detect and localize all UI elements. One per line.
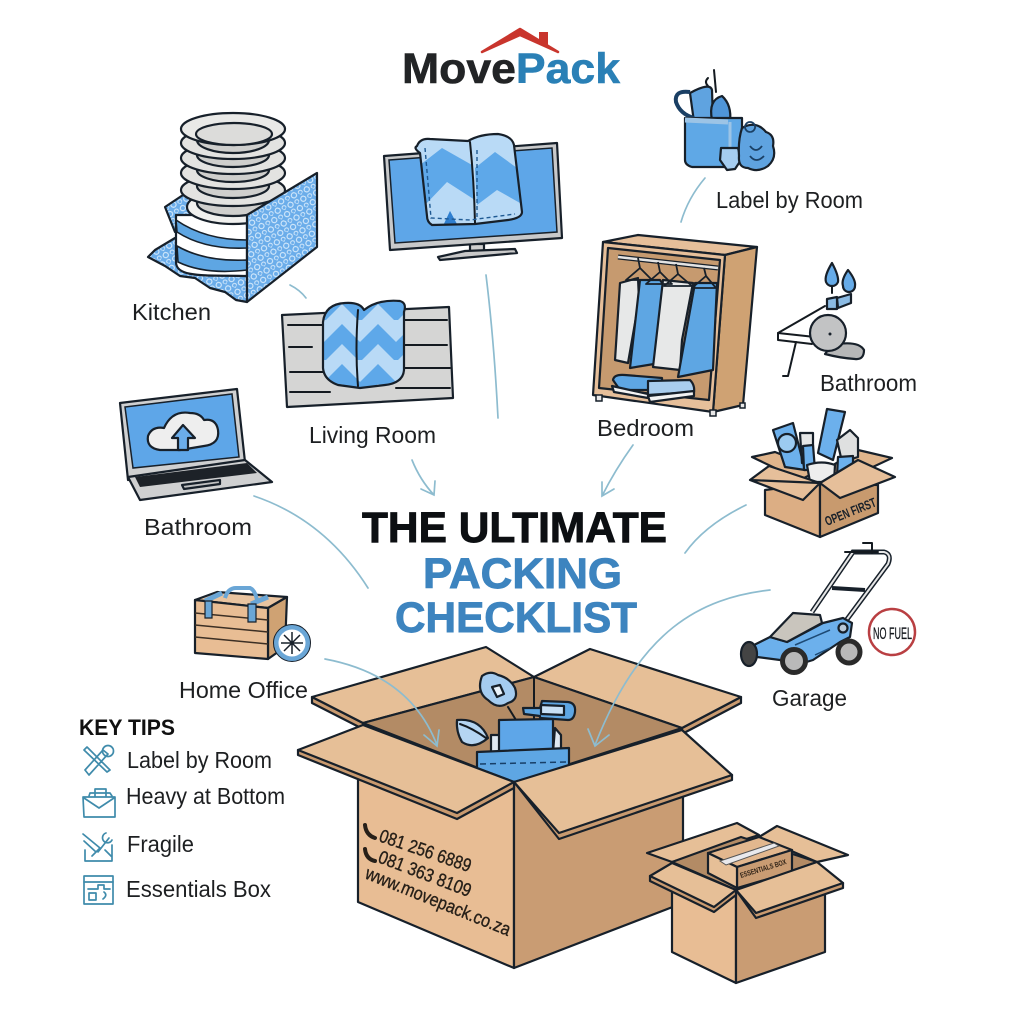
icon: wooden crate [195, 588, 310, 662]
title line 1: THE ULTIMATE [362, 504, 667, 552]
box contact text: 081 256 6889 [377, 825, 474, 876]
arrows into big box [325, 590, 770, 746]
box contact text: 081 363 8109 [376, 846, 475, 901]
logo roof [482, 29, 558, 52]
logo [402, 29, 620, 93]
key tips heading: KEY TIPS [79, 715, 175, 740]
title line 3: CHECKLIST [395, 594, 637, 642]
label: Bathroom (left): Bathroom [144, 514, 252, 540]
tip: Heavy at Bottom: Heavy at Bottom [126, 783, 285, 809]
box right face [514, 770, 683, 968]
box left face [358, 778, 514, 968]
tip: Label by Room: Label by Room [127, 747, 272, 773]
icon: rug with blanket [282, 301, 453, 407]
icon: no fuel badge [869, 609, 915, 655]
tip: Essentials Box: Essentials Box [126, 876, 271, 902]
icon: tap and basin [778, 263, 864, 376]
label: Home Office: Home Office [179, 677, 308, 703]
label: Garage: Garage [772, 685, 847, 711]
box contents [457, 673, 575, 782]
tip: Fragile: Fragile [127, 831, 194, 857]
box contact text: www.movepack.co.za [362, 862, 515, 940]
small cardboard box [647, 823, 848, 983]
box back flaps [312, 647, 741, 734]
icon: utensil bucket [676, 70, 774, 170]
label: Bathroom (right): Bathroom [820, 370, 917, 396]
icon: essentials box [750, 409, 895, 537]
label: Bedroom: Bedroom [597, 415, 694, 441]
label: Label by Room: Label by Room [716, 187, 863, 213]
icon: laptop with cloud upload [120, 389, 272, 500]
title [362, 504, 667, 642]
label: Living Room: Living Room [309, 422, 436, 448]
connector arrows [254, 178, 746, 588]
key tips panel [79, 715, 285, 904]
logo wordmark: MovePack [402, 45, 620, 93]
tip: Fragile [83, 831, 194, 861]
box interior [363, 677, 682, 782]
icon: stacked plates in bubble wrap [148, 113, 317, 302]
big cardboard box [298, 647, 741, 968]
tip: Label by Room [84, 746, 272, 775]
small box inner parcel: ESSENTIALS BOX [739, 857, 787, 880]
label: Kitchen: Kitchen [132, 299, 211, 325]
box contact text [362, 825, 515, 940]
icon: TV with blanket [384, 134, 562, 260]
box front flaps [298, 725, 732, 839]
icon: wardrobe with clothes [593, 235, 757, 416]
icon: lawn mower [741, 543, 889, 672]
box label: OPEN FIRST [823, 495, 878, 529]
title line 2: PACKING [423, 550, 622, 598]
tip: Heavy at Bottom [83, 783, 285, 817]
small box inner parcel [708, 837, 792, 888]
icon: no fuel badge: NO FUEL [873, 624, 912, 643]
tip: Essentials Box [84, 876, 271, 904]
